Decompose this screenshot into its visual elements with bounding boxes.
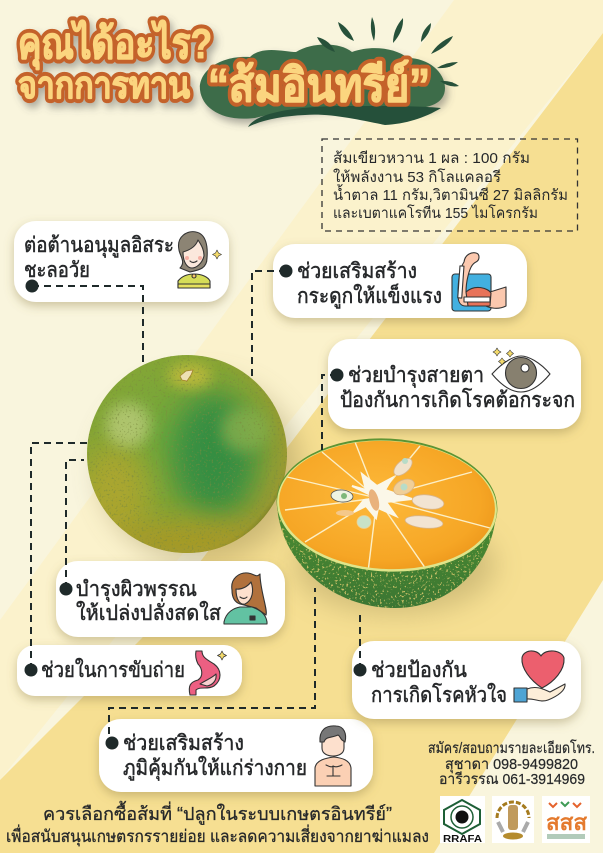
card: antioxidants: [14, 221, 229, 302]
title line 1: คุณได้อะไร?: [18, 19, 212, 70]
card 7 text: ช่วยป้องกัน: [371, 659, 467, 682]
closing message: ควรเลือกซื้อส้มที่ “ปลูกในระบบเกษตรอินทรีย์”: [43, 801, 392, 825]
card 2 text: [297, 260, 442, 309]
title highlight: “ส้มอินทรีย์”: [208, 59, 430, 111]
closing message: เพื่อสนับสนุนเกษตรกรรายย่อย และลดความเสี่ยงจากยาฆ่าแมลง: [6, 824, 429, 847]
title line 2: จากการทาน: [18, 65, 190, 107]
nutrition facts box: และเบตาแคโรทีน 155 ไมโครกรัม: [333, 204, 538, 222]
title line 2: จากการทาน: [18, 65, 190, 107]
card: heart disease: [352, 641, 581, 719]
icon: stomach: [189, 651, 226, 695]
card: skin: [56, 561, 285, 637]
card 2 text: กระดูกให้แข็งแรง: [297, 282, 442, 309]
logo: RRAFA: RRAFA: [443, 834, 482, 845]
logo: ThaiHealth: สสส: [546, 810, 588, 835]
logo: emblem: [492, 796, 534, 843]
card 3 text: ป้องกันการเกิดโรคต้อกระจก: [340, 388, 575, 412]
icon: smiling girl: [224, 573, 267, 624]
card 1 text: ต่อต้านอนุมูลอิสระ: [24, 234, 174, 258]
card 1 text: [24, 234, 174, 282]
card: bones: [273, 244, 527, 318]
card: eyesight: [328, 339, 581, 429]
nutrition facts box: [322, 139, 578, 231]
card 3 text: [340, 364, 575, 412]
seeds: [331, 455, 445, 530]
card 6 text: ช่วยเสริมสร้าง: [123, 732, 244, 755]
card 4 text: บำรุงผิวพรรณ: [76, 578, 197, 602]
title block: [18, 17, 459, 127]
title shadow and green bubble: [200, 44, 445, 127]
card 2 text: ช่วยเสริมสร้าง: [297, 260, 417, 283]
stem scar: [180, 370, 193, 381]
icon: man torso: [315, 726, 351, 786]
card 6 text: ภูมิคุ้มกันให้แก่ร่างกาย: [123, 756, 307, 781]
card 7 text: [371, 659, 507, 707]
contact information: สุชาดา 098-9499820: [445, 756, 578, 774]
card 7 text: การเกิดโรคหัวใจ: [371, 683, 507, 707]
icon: heart in hand: [514, 651, 565, 702]
logo: RRAFA: [440, 796, 485, 845]
card 4 text: [76, 578, 221, 625]
card 4 text: ให้เปล่งปลั่งสดใส: [76, 598, 221, 625]
title line 1: คุณได้อะไร?: [18, 19, 212, 70]
nutrition facts box: น้ำตาล 11 กรัม,วิตามินซี 27 มิลลิกรัม: [333, 184, 568, 204]
card 3 text: ช่วยบำรุงสายตา: [348, 364, 484, 388]
card 5 text: ช่วยในการขับถ่าย: [41, 658, 185, 682]
halved tangerine: [273, 433, 501, 613]
title highlight: “ส้มอินทรีย์”: [208, 59, 430, 111]
closing message: [6, 801, 429, 847]
card 6 text: [123, 732, 307, 781]
contact information: [428, 739, 595, 788]
card: digestion: [17, 645, 242, 696]
connector lines and dots: [24, 264, 366, 750]
icon: muscle and bone: [452, 253, 506, 311]
card 1 text: ชะลอวัย: [24, 259, 90, 282]
icon: woman: [178, 232, 222, 288]
nutrition facts box: ส้มเขียวหวาน 1 ผล : 100 กรัม: [333, 150, 530, 167]
nutrition facts box: ให้พลังงาน 53 กิโลแคลอรี: [333, 168, 501, 186]
icon: eye: [492, 348, 550, 392]
contact information: อารีวรรณ 061-3914969: [439, 771, 585, 788]
whole green tangerine: [81, 353, 300, 562]
decorative rays: [317, 17, 459, 86]
card: immunity: [99, 719, 373, 792]
logo: ThaiHealth: [542, 796, 590, 843]
